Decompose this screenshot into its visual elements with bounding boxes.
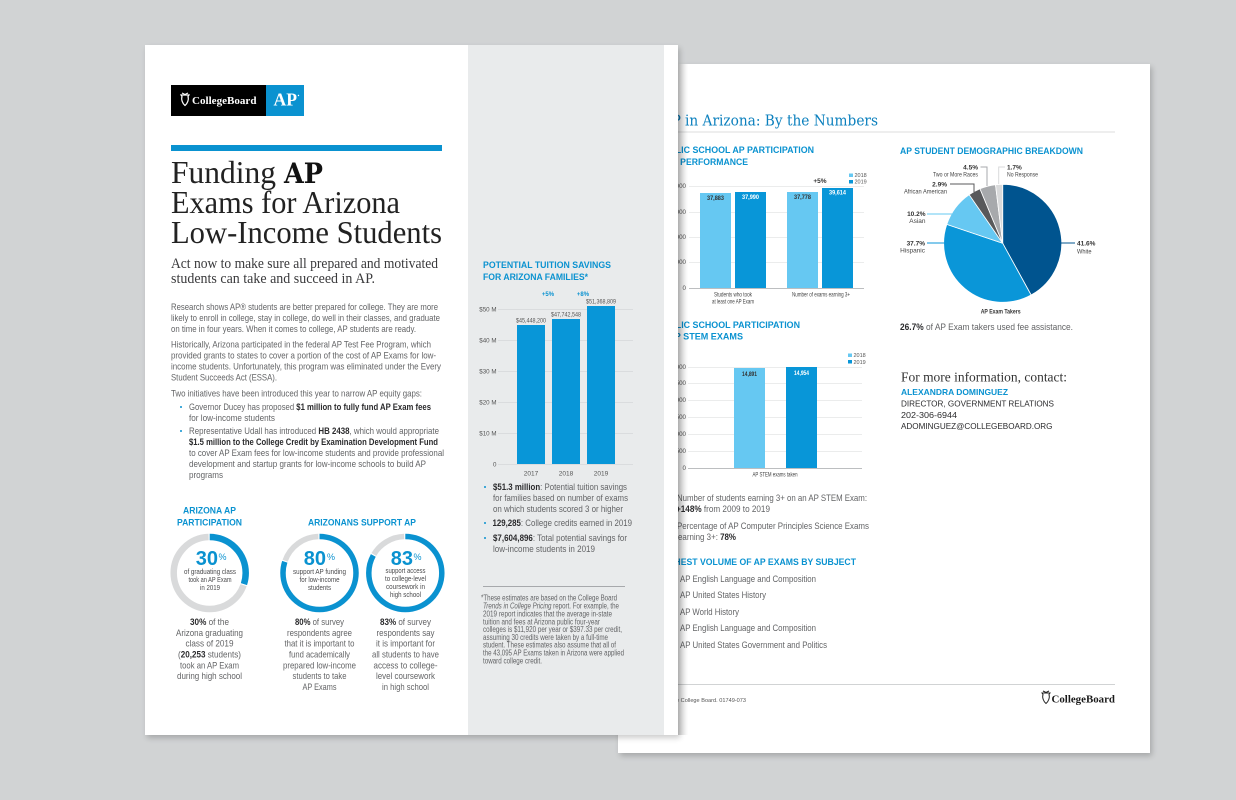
text block: 30 percent detail: during high school [177,671,242,682]
text block: footnote: assuming 30 credits were taken by a full-time [483,633,608,642]
text block: 80 percent detail: students to take [292,671,346,682]
list: exams by subject: AP United States History [680,590,766,600]
bar chart: participation and performance: 37,778 [794,194,811,201]
list: exams by subject: AP English Language and Composition [680,574,816,584]
text block: 30 percent detail: class of 2019 [186,638,234,650]
donut: 30 percent: 30 [196,548,218,570]
pie chart: demographics: 10.2% [907,211,926,218]
list: tuition savings facts: on which students scored 3 or higher [493,504,623,515]
text block: 83 percent detail: 83% of survey [380,617,431,628]
pie chart: demographics: 41.6% [1077,240,1096,248]
bar chart: stem exams: 14,891 [742,371,757,378]
text block: stem statistics: Number of students earning 3+ on an AP STEM Exam: [677,493,867,503]
heading: by the numbers: AP [659,112,681,130]
bar chart: tuition savings: 2017 [524,470,539,478]
panel: back page [618,64,1152,756]
pie chart: demographics: Asian [909,218,926,225]
donut: 80 percent: 80 [304,548,326,570]
text block: contact: ALEXANDRA DOMINGUEZ [901,387,1008,397]
title: Exams for Arizona [171,184,400,220]
heading: potential tuition savings: FOR ARIZONA FAMILIES* [483,272,588,282]
text block: 30 percent detail [176,617,243,682]
text block: 83 percent detail: level coursework [376,671,435,682]
text block: body copy: on time in four years. When it comes to college, AP students are ready. [171,324,416,335]
bar chart: stem exams: 5,000 [671,431,687,438]
title: AP [283,157,323,190]
text block: footnote: 2019 report indicates that the average in-state [483,610,612,618]
bar chart: participation and performance: 20,000 [667,234,687,241]
heading: arizona ap participation [177,506,242,528]
bar chart: tuition savings: $30 M [479,368,496,376]
heading: stem exams: IN AP STEM EXAMS [657,332,743,342]
text block: 83 percent detail: respondents say [376,628,435,639]
list: exams by subject: AP World History [680,607,739,617]
list: tuition savings facts: 129,285: College credits earned in 2019 [492,518,632,529]
bar chart: tuition savings: $47,742,548 [551,312,581,318]
donut: 30 percent: of graduating class [184,567,236,576]
text block: stem statistics [676,493,869,542]
bar chart: stem exams: 2018 [854,353,866,359]
panel: front page [145,45,680,738]
bar chart: tuition savings [479,292,633,478]
bar chart: participation and performance: 37,883 [707,195,724,202]
text block: body copy: income students. Unfortunately, this program was eliminated under the Every [171,362,441,372]
bar chart: tuition savings: +5% [542,292,555,298]
donut: 83 percent: to college-level [385,574,426,583]
donut: 83 percent: support access [386,566,426,575]
bar chart: tuition savings: $10 M [479,430,496,438]
heading: arizona ap participation: ARIZONA AP [183,506,236,516]
text block: body copy [171,302,441,400]
bar chart: stem exams: 0 [683,465,687,472]
text block: body copy: Student Succeeds Act (ESSA). [171,372,277,384]
text block: fee assistance: 26.7% of AP Exam takers used fee assistance. [900,322,1073,332]
subheading: Act now to make sure all prepared and motivated [171,256,438,272]
pie chart: demographics: 1.7% [1007,164,1022,172]
text block: footnote: student. These estimates also assume that all of [483,640,617,650]
subheading: students can take and succeed in AP. [171,271,375,287]
pie chart: demographics: White [1077,248,1092,256]
pie chart: demographics: African American [904,188,947,196]
list: tuition savings facts: $51.3 million: Potential tuition savings [493,482,627,493]
text block: body copy: likely to enroll in college, stay in college, do well in their classes, and graduate [171,313,440,324]
bar chart: stem exams: 2,500 [671,448,687,455]
bar chart: stem exams: 14,954 [794,370,809,377]
list: exams by subject: AP United States Government and Politics [680,640,827,650]
bar chart: stem exams: 2019 [854,360,866,366]
donut: 80 percent: for low-income [300,575,340,584]
text block: 30 percent detail: 30% of the [190,617,229,628]
text block: contact: For more information, contact: [901,370,1067,384]
bar chart: stem exams: 7,500 [671,414,687,421]
heading: stem exams: PUBLIC SCHOOL PARTICIPATION [657,320,800,330]
bar chart: participation and performance: at least one AP Exam [712,298,754,306]
pie chart: demographics: Hispanic [900,248,926,254]
text block: 80 percent detail: that it is important to [284,638,354,650]
text block: 80 percent detail: prepared low-income [283,660,356,672]
list: initiatives: to cover AP Exam fees for low-income students and provide professional [189,448,444,459]
heading: participation and performance [657,145,814,167]
bar chart: participation and performance: 30,000 [667,209,687,216]
logo: college board and AP: AP [274,90,297,110]
text block: 80 percent detail: fund academically [289,650,350,660]
list: initiatives: for low-income students [189,413,275,424]
list: initiatives: development and startup grants for low-income schools to build AP [189,459,426,470]
text block: 83 percent detail: access to college- [374,660,438,672]
list: initiatives: Representative Udall has introduced HB 2438, which would appropriate [189,426,439,437]
donut: 80 percent: % [327,552,335,562]
donut: 30 percent [174,537,246,609]
list: tuition savings facts: for families based on number of exams [493,493,628,504]
bar chart: tuition savings: 0 [493,462,497,468]
text block: 80 percent detail [283,617,356,693]
pie chart: demographics [900,164,1096,316]
pie chart: demographics: AP Exam Takers [981,308,1021,316]
text block: footnote: toward college credit. [483,656,542,666]
donut: 30 percent: took an AP Exam [188,575,232,584]
heading: by the numbers: in Arizona: By the Numbers [685,112,878,130]
logo: college board and AP [171,85,304,116]
text block: 83 percent detail [372,617,439,693]
text block: body copy: Research shows AP® students are better prepared for college. They are more [171,302,438,313]
list: exams by subject: AP English Language and Composition [680,623,816,633]
bar chart: participation and performance: 2019 [854,180,867,186]
bar chart: participation and performance: +5% [813,178,827,185]
bar chart: participation and performance: 37,990 [742,194,759,201]
accent bar [171,145,442,151]
list: tuition savings facts [484,482,632,555]
text block: 80 percent detail: AP Exams [302,682,337,693]
title: Low-Income Students [171,214,442,250]
heading: participation and performance: PUBLIC SCHOOL AP PARTICIPATION [657,145,814,155]
bar chart: tuition savings: 2018 [559,470,574,478]
list: initiatives [180,402,444,481]
donut: 30 percent: in 2019 [200,583,220,592]
heading: participation and performance: AND PERFORMANCE [659,157,748,167]
bar chart: stem exams: 10,000 [667,397,687,404]
text block: 30 percent detail: took an AP Exam [180,660,239,672]
list: exams by subject [680,574,827,650]
title: Funding [171,154,276,190]
pie chart: demographics: 2.9% [932,182,947,188]
donut: 83 percent: 83 [391,548,413,570]
bar chart: participation and performance: 2018 [854,173,867,179]
text block: 83 percent detail: in high school [382,682,429,693]
bar chart: stem exams: 12,500 [667,380,687,387]
text block: contact [901,370,1067,431]
text block: footnote: Trends in College Pricing report. For example, the [483,602,619,610]
list: tuition savings facts: $7,604,896: Total potential savings for [493,533,627,544]
text block: stem statistics: earning 3+: 78% [678,532,736,542]
text block: 83 percent detail: it is important for [376,638,435,650]
bar chart: stem exams: AP STEM exams taken [752,472,798,478]
bar chart: participation and performance: 39,614 [829,190,846,196]
bar chart: participation and performance [667,173,867,306]
donut: 80 percent: support AP funding [293,567,346,576]
heading: stem exams [657,320,800,342]
pie chart: demographics: No Response [1007,172,1038,178]
text block: 30 percent detail: (20,253 students) [178,650,241,660]
text block: footnote: *These estimates are based on the College Board [481,594,617,602]
text block: body copy: Historically, Arizona participated in the federal AP Test Fee Program, which [171,340,431,350]
pie chart: demographics: Two or More Races [933,172,979,178]
bar chart: tuition savings: 2019 [594,470,609,478]
donut: 30 percent: % [218,552,227,562]
pie chart: demographics: 4.5% [963,164,978,172]
list: initiatives: $1.5 million to the College Credit by Examination Development Fund [189,437,438,448]
list: tuition savings facts: low-income students in 2019 [493,544,595,555]
text block: footnote: tuition and fees at Arizona public four-year [483,618,600,626]
bar chart: stem exams [667,353,866,478]
logo: college board footer: CollegeBoard [1052,694,1115,706]
bar chart: tuition savings: $45,448,200 [516,318,546,324]
list: initiatives: programs [189,470,223,481]
bar chart: participation and performance: 0 [683,285,687,292]
text block: contact: ADOMINGUEZ@COLLEGEBOARD.ORG [901,421,1052,431]
bar chart: participation and performance: Number of exams earning 3+ [792,292,850,298]
donut: 80 percent: students [308,583,331,592]
subheading [171,256,438,287]
text block: stem statistics: Percentage of AP Computer Principles Science Exams [677,521,869,531]
bar chart: participation and performance: 10,000 [667,259,687,266]
heading: potential tuition savings [483,260,611,282]
text block: 80 percent detail: 80% of survey [295,617,344,628]
footer: copyright: © 2019 The College Board. 01749-073 [650,697,746,704]
text block: 30 percent detail: Arizona graduating [176,628,243,639]
donut: 83 percent: % [414,552,422,562]
pie chart: demographics: 37.7% [907,240,925,248]
title [171,154,442,250]
text block: 80 percent detail: respondents agree [287,628,352,639]
text block: footnote: the 43,095 AP Exams taken in Arizona were applied [483,648,624,658]
heading: arizona ap participation: PARTICIPATION [177,518,242,528]
bar chart: tuition savings: $51,368,809 [586,298,616,306]
bar chart: participation and performance: Students who took [714,292,753,298]
text block: footnote: colleges is $11,920 per year or $397.33 per credit, [483,625,622,634]
donut: 83 percent: coursework in [386,582,425,591]
bar chart: tuition savings: $40 M [479,338,496,344]
bar chart: tuition savings: +8% [577,292,590,298]
bar chart: tuition savings: $50 M [479,306,496,314]
bar chart: participation and performance: 40,000 [667,183,687,190]
bar chart: tuition savings: $20 M [479,400,496,406]
donut: 83 percent: high school [390,590,421,599]
heading: highest volume: HIGHEST VOLUME OF AP EXAMS BY SUBJECT [659,557,856,567]
heading: demographic breakdown: AP STUDENT DEMOGRAPHIC BREAKDOWN [900,146,1083,156]
bar chart: stem exams: 15,000 [667,364,687,371]
text block: body copy: provided grants to states to cover a portion of the cost of AP Exams for low- [171,350,436,362]
list: initiatives: Governor Ducey has proposed $1 million to fully fund AP Exam fees [189,402,431,413]
heading: potential tuition savings: POTENTIAL TUITION SAVINGS [483,260,611,270]
text block: 83 percent detail: all students to have [372,650,439,660]
text block: stem statistics: +148% from 2009 to 2019 [676,504,770,514]
logo: college board and AP: CollegeBoard [192,95,256,107]
donut: 83 percent [369,536,442,610]
heading: arizonans support ap: ARIZONANS SUPPORT AP [308,518,416,528]
text block: contact: 202-306-6944 [901,410,957,420]
text block: body copy: Two initiatives have been introduced this year to narrow AP equity gaps: [171,388,422,400]
text block: contact: DIRECTOR, GOVERNMENT RELATIONS [901,398,1054,408]
text block: footnote [481,594,624,666]
donut: 80 percent [283,536,356,610]
